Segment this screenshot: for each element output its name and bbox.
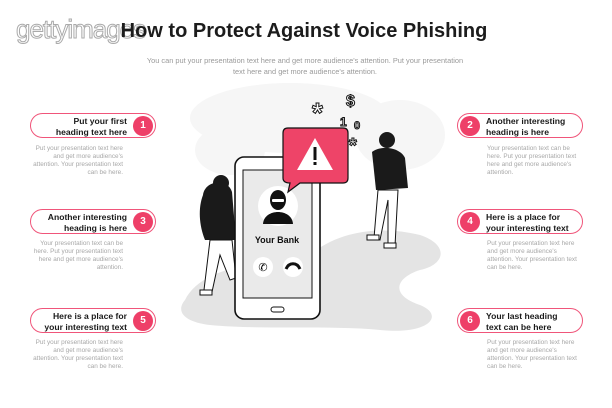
item 3 [30, 209, 156, 271]
person right [367, 132, 408, 248]
alert bubble [283, 128, 348, 192]
phone: ✆ [258, 262, 268, 274]
symbols: * [349, 135, 357, 157]
text: Another interesting [486, 116, 565, 126]
text: heading text here [56, 126, 127, 136]
item 4 [457, 209, 583, 271]
subtitle: You can put your presentation text here and get more audience's attention. Put your presentation text here and get more audience's attention. [147, 56, 463, 76]
text: 1 [140, 120, 146, 130]
text: Put your presentation text here and get more audience's attention. Your presentation text can be here. [33, 339, 123, 370]
text: Put your first [74, 116, 127, 126]
floor shadow [181, 230, 441, 331]
text: your interesting text [486, 222, 569, 232]
item 6 [457, 308, 583, 370]
text: 3 [140, 216, 146, 226]
symbols: * [312, 97, 323, 128]
item 1 [30, 113, 156, 176]
text: Your presentation text can be here. Put your presentation text here and get more audience's attention. [487, 145, 576, 176]
watermark: gettyimages [16, 14, 145, 44]
text: Here is a place for [53, 311, 127, 321]
item 2 [457, 113, 583, 176]
title: How to Protect Against Voice Phishing [121, 20, 487, 42]
text: heading is here [486, 126, 549, 136]
symbols: 1 [340, 115, 347, 129]
text: Your last heading [486, 311, 557, 321]
phone: Your Bank [255, 235, 300, 245]
text: Put your presentation text here and get more audience's attention. Your presentation text can be here. [487, 240, 577, 271]
text: 2 [467, 120, 473, 130]
phone [235, 157, 320, 319]
item 5 [30, 308, 156, 370]
text: Your presentation text can be here. Put your presentation text here and get more audience's attention. [34, 240, 123, 271]
text: Here is a place for [486, 212, 560, 222]
symbols: 0 [354, 120, 360, 132]
text: Put your presentation text here and get more audience's attention. Your presentation text can be here. [33, 145, 123, 176]
text: heading is here [64, 222, 127, 232]
text: your interesting text [44, 322, 127, 332]
text: 4 [467, 216, 473, 226]
text: Put your presentation text here and get more audience's attention. Your presentation text can be here. [487, 339, 577, 370]
symbols [312, 93, 360, 157]
person left [200, 175, 236, 295]
text: 5 [140, 314, 146, 326]
text: Another interesting [48, 212, 127, 222]
text: text can be here [486, 322, 551, 332]
map dots background [190, 83, 445, 175]
symbols: $ [346, 93, 355, 110]
text: 6 [467, 314, 473, 326]
